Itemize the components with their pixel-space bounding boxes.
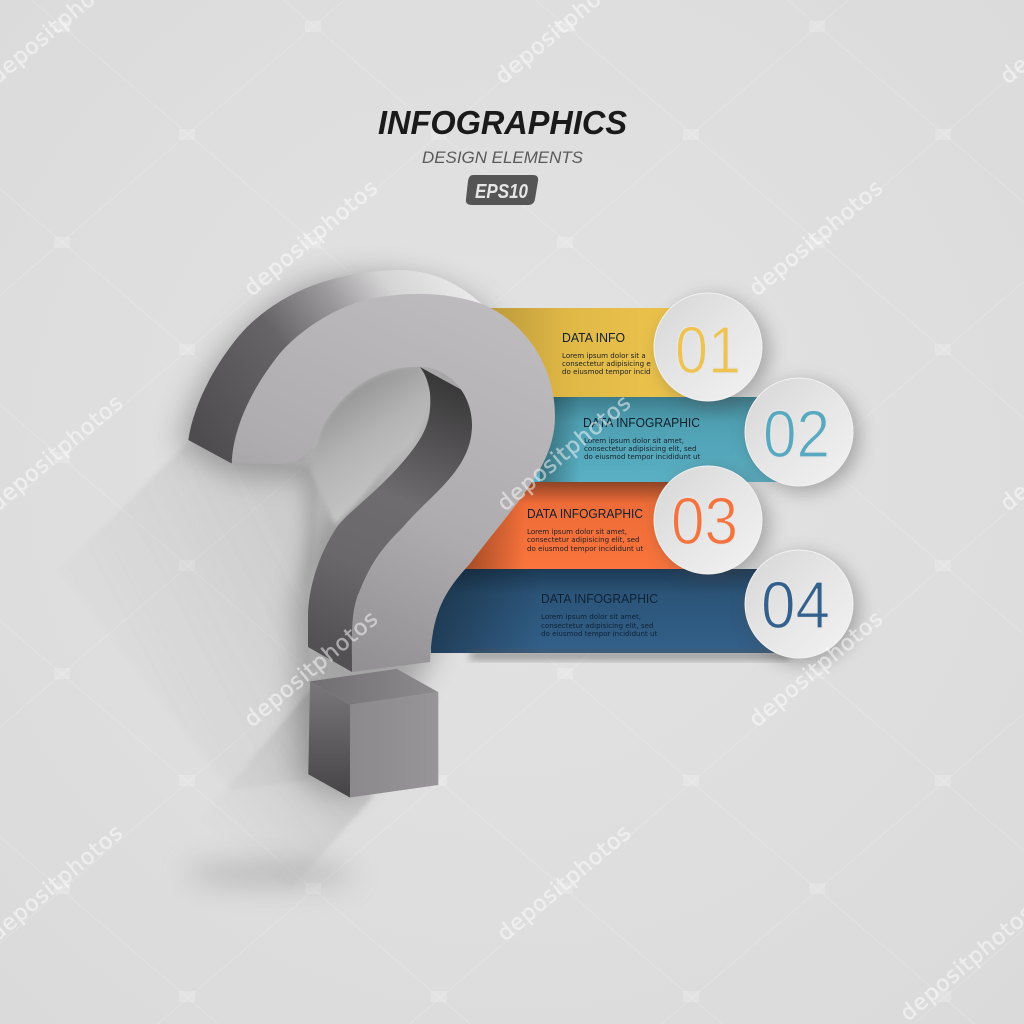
circle 04: 04: [761, 568, 830, 643]
shadow under hook toward stem: [300, 440, 400, 590]
watermark text: depositphotos: [745, 607, 888, 733]
text block 04: Lorem ipsum dolor sit amet,: [541, 612, 641, 621]
circle 01: 01: [675, 313, 741, 388]
title: INFOGRAPHICS: [378, 104, 627, 141]
text block 02: [583, 416, 701, 461]
text block 04: consectetur adipisicing elit, sed: [541, 621, 654, 630]
text block 01: Lorem ipsum dolor sit a: [562, 351, 646, 360]
text block 03: consectetur adipisicing elit, sed: [527, 535, 640, 544]
circle 01: [654, 293, 762, 401]
soft shadow around question mark: [178, 273, 553, 800]
circle 03: [654, 466, 762, 574]
watermark text: depositphotos: [745, 176, 888, 302]
front face: [232, 294, 555, 672]
panel: yellow band 01: [480, 308, 700, 397]
icon: question mark dot cube: [308, 669, 438, 798]
text block 01: do eiusmod tempor incid: [562, 367, 651, 376]
badge: EPS10: [466, 175, 538, 205]
text block 03: Lorem ipsum dolor sit amet,: [527, 527, 627, 536]
hook extrusion: [188, 270, 482, 464]
text block 03: DATA INFOGRAPHIC: [527, 507, 643, 521]
panel: orange band 03: [465, 482, 715, 569]
inner extrusion: [308, 367, 480, 672]
circle shadows: [659, 297, 859, 664]
floor shadow ellipse: [185, 863, 355, 885]
badge: EPS10: EPS10: [475, 181, 528, 203]
watermark text: depositphotos: [493, 821, 636, 947]
text block 02: DATA INFOGRAPHIC: [583, 416, 700, 430]
text block 02: do eiusmod tempor incididunt ut: [584, 452, 701, 461]
subtitle: DESIGN ELEMENTS: [422, 148, 584, 167]
text block 04: do eiusmod tempor incididunt ut: [541, 629, 658, 638]
circle 02: [745, 378, 853, 486]
text block 04: [541, 592, 658, 638]
text block 01: DATA INFO: [562, 331, 625, 345]
text block 01: [562, 331, 651, 376]
text block 03: do eiusmod tempor incididunt ut: [527, 544, 644, 553]
text block 01: consectetur adipisicing e: [562, 359, 651, 368]
icon: question mark: [188, 270, 555, 672]
text block 03: [527, 507, 644, 553]
text block 02: consectetur adipisicing elit, sed: [584, 444, 697, 453]
watermark text: depositphotos: [493, 391, 636, 517]
long shadow of hook: [60, 442, 320, 790]
circle 03: 03: [671, 484, 738, 559]
text block 02: Lorem ipsum dolor sit amet,: [584, 436, 684, 445]
band shadow: [470, 651, 790, 660]
panel: teal band 02: [520, 397, 795, 482]
watermark text: depositphotos: [240, 607, 383, 733]
watermark text: depositphotos: [240, 176, 383, 302]
circle 04: [745, 550, 853, 658]
circle 02: 02: [763, 397, 830, 472]
long shadow of cube: [200, 690, 373, 890]
text block 04: DATA INFOGRAPHIC: [541, 592, 658, 606]
counter shadow inside question mark: [310, 367, 432, 525]
panel: blue band 04: [431, 569, 801, 660]
